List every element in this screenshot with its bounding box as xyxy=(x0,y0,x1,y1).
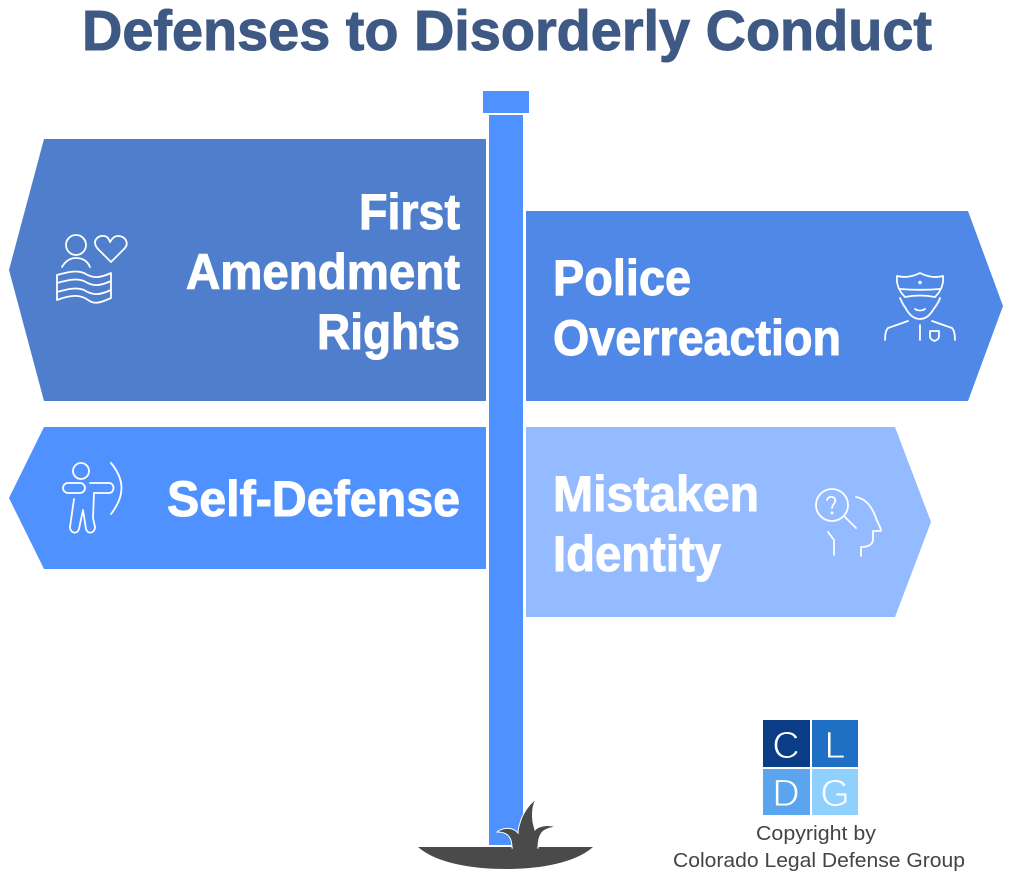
heading: First Amendment Rights: Amendment xyxy=(186,244,460,300)
heading: First Amendment Rights xyxy=(186,184,460,360)
copyright text xyxy=(673,823,965,872)
heading: First Amendment Rights: Rights xyxy=(317,304,460,360)
signpost pole xyxy=(483,91,529,845)
sign: Self-Defense xyxy=(9,427,486,569)
copyright text: Copyright by xyxy=(756,823,876,845)
heading: Self-Defense: Self-Defense xyxy=(167,471,460,527)
copyright text: Colorado Legal Defense Group xyxy=(673,850,965,872)
heading: Mistaken Identity: Identity xyxy=(553,526,721,582)
heading: Mistaken Identity: Mistaken xyxy=(553,466,759,522)
logo: CLDG: L xyxy=(824,725,846,767)
icon: person, heart and flag xyxy=(57,235,127,303)
title: Defenses to Disorderly Conduct xyxy=(82,0,932,63)
icon: archer with bow xyxy=(63,463,122,533)
icon: head with magnifying glass and question mark xyxy=(816,489,881,556)
logo: CLDG: G xyxy=(820,773,850,815)
heading: Mistaken Identity xyxy=(553,466,759,582)
sign: Police Overreaction xyxy=(526,211,1003,401)
ground with grass xyxy=(418,799,593,869)
logo: CLDG: D xyxy=(772,773,800,815)
heading: Police Overreaction: Overreaction xyxy=(553,310,841,366)
sign: Mistaken Identity xyxy=(526,427,931,617)
logo: CLDG: C xyxy=(772,725,800,767)
heading: First Amendment Rights: First xyxy=(359,184,460,240)
heading: Police Overreaction: Police xyxy=(553,250,691,306)
sign: First Amendment Rights xyxy=(9,139,486,401)
heading: Police Overreaction xyxy=(553,250,841,366)
icon: police officer xyxy=(885,273,955,341)
logo: CLDG xyxy=(763,720,858,815)
